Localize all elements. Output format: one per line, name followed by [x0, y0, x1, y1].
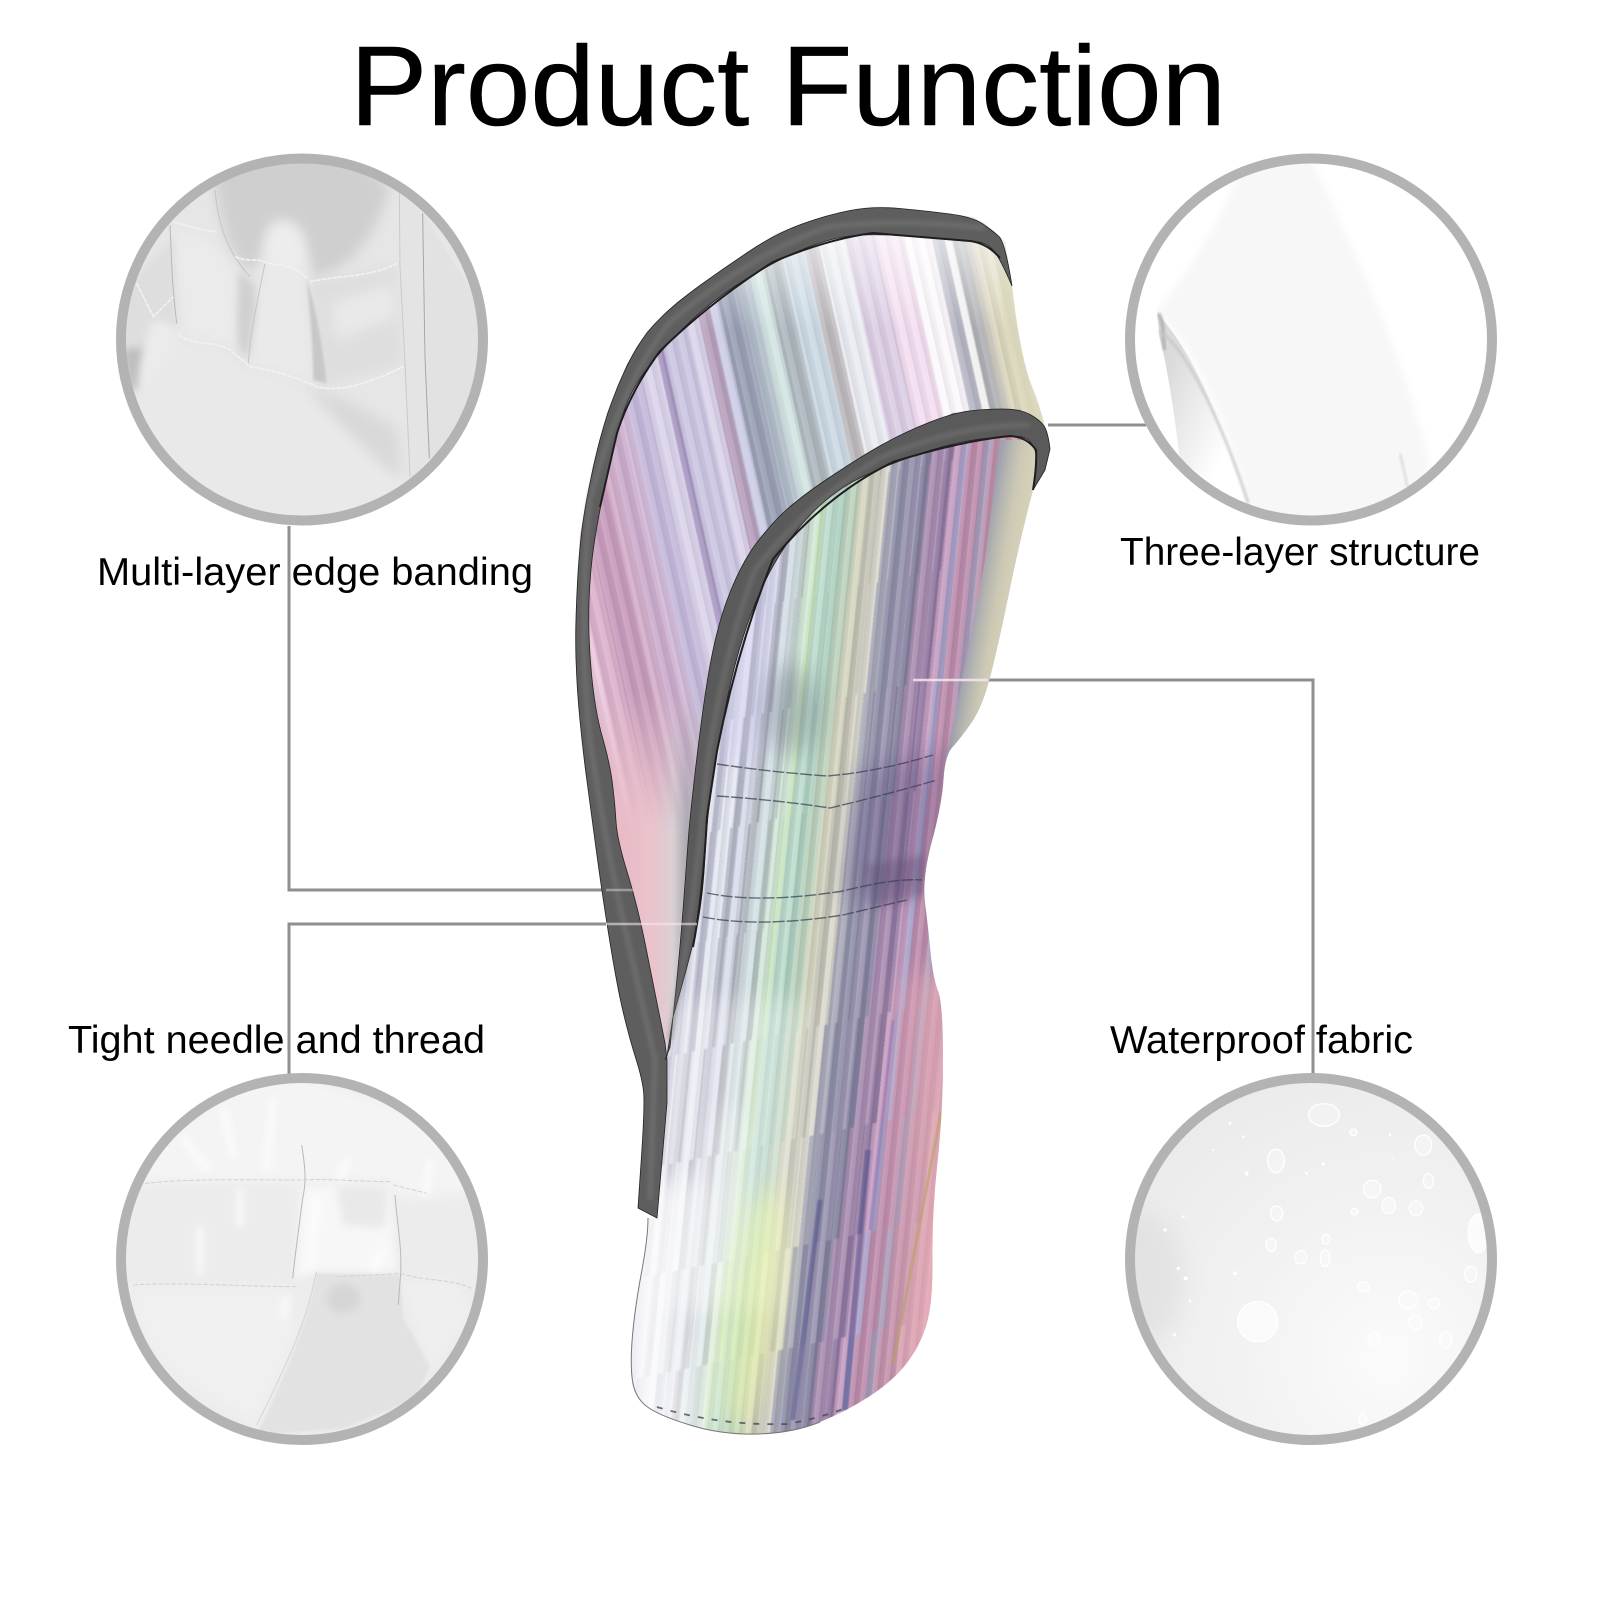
back panel piping [576, 208, 1012, 1218]
connector: waterproof fabric [988, 680, 1313, 1074]
back panel fabric [575, 206, 1046, 1054]
label: waterproof fabric: Waterproof fabric [1110, 1019, 1413, 1062]
label: tight needle and thread: Tight needle and thread [68, 1019, 485, 1062]
front panel piping [665, 409, 1050, 1060]
title: Product Function [350, 23, 1226, 149]
pale connector ends over product [606, 680, 988, 924]
front piping highlight [670, 425, 1030, 1040]
label: multi-layer edge banding: Multi-layer edge banding [97, 551, 533, 594]
back piping inner edge [600, 233, 1000, 507]
product: golf head cover [575, 206, 1050, 1435]
front piping inner edge [693, 436, 1036, 947]
detail circle: waterproof fabric [1125, 1073, 1497, 1445]
label: three-layer structure: Three-layer structure [1120, 531, 1480, 574]
detail circle: tight needle and thread [110, 1065, 500, 1455]
water drops [1238, 1104, 1488, 1424]
stitched seams [657, 755, 937, 1424]
front panel fabric [632, 409, 1035, 1434]
back piping highlight [584, 223, 985, 1200]
connector: three-layer structure [1048, 424, 1146, 426]
connector: multi-layer edge banding [289, 526, 606, 890]
connector: tight needle and thread [289, 924, 606, 1074]
detail circle: multi-layer edge banding [116, 154, 488, 526]
lower hem outline [631, 1218, 820, 1434]
detail circle: three-layer structure [1120, 150, 1510, 540]
